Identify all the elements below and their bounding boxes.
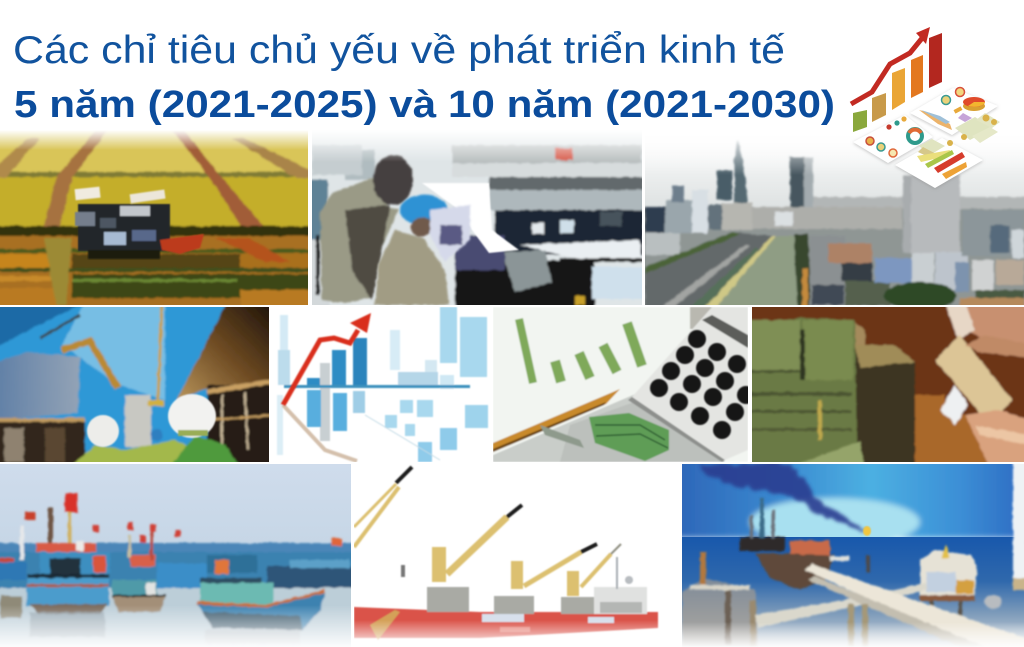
green paper bars xyxy=(519,319,642,383)
title line 2: 5 năm (2021-2025) và 10 năm (2021-2030) xyxy=(14,84,835,126)
rig platform xyxy=(740,498,870,590)
central blue bars xyxy=(307,338,367,441)
worker: standing man xyxy=(320,155,413,303)
trestle walkway xyxy=(755,583,927,628)
horizontal bar chart xyxy=(917,150,967,179)
panel: welding workers photo xyxy=(312,138,642,305)
rising bars xyxy=(853,33,942,132)
title line 1: Các chỉ tiêu chủ yếu về phát triển kinh tế xyxy=(13,29,785,72)
tower building xyxy=(0,352,80,420)
crane arm xyxy=(62,341,118,388)
red trend arrow xyxy=(851,27,930,104)
worker: man in blue helmet xyxy=(375,195,470,305)
panel: calculator and paper chart photo xyxy=(493,307,755,462)
icon: white hard hats xyxy=(87,394,216,447)
water reflections xyxy=(30,612,105,637)
panel: banknote stacks photo xyxy=(746,302,1024,467)
crane booms and posts xyxy=(354,484,611,587)
right process platform xyxy=(920,544,977,617)
small tan boat xyxy=(112,580,166,612)
report sheets xyxy=(853,88,998,188)
panel: blue growth chart graphic xyxy=(272,307,493,462)
welding glare xyxy=(422,183,519,253)
flare flame xyxy=(863,526,871,536)
calculator body xyxy=(632,307,748,460)
pale blue data blocks xyxy=(277,307,488,462)
teal and blue wooden boat xyxy=(197,578,325,630)
hands and banknotes xyxy=(966,307,1024,358)
red ship hull xyxy=(354,607,658,640)
pencil xyxy=(493,389,620,452)
smoke plume from flare xyxy=(700,464,866,531)
banknote stacks xyxy=(918,113,1000,160)
area chart xyxy=(919,106,972,130)
panel: city skyline and river photo xyxy=(645,140,1024,305)
panel: fishing boats photo xyxy=(0,464,357,647)
icon: business charts illustration xyxy=(851,27,1000,188)
green fan charts xyxy=(589,413,669,461)
panel: offshore oil platform photo xyxy=(676,458,1024,647)
green front stacks xyxy=(746,318,857,467)
flags and masts xyxy=(20,493,342,560)
skyline towers xyxy=(645,140,813,233)
neighbouring white column xyxy=(1013,458,1024,580)
icon: harvester machine xyxy=(75,187,204,259)
calculator buttons xyxy=(650,330,755,439)
crane bases xyxy=(427,587,594,614)
pie chart xyxy=(963,97,985,111)
dark rear stack xyxy=(855,345,915,467)
panel: construction site photo xyxy=(0,302,274,467)
red trend arrow xyxy=(283,313,371,461)
panel: rice field harvester photo xyxy=(0,125,314,310)
panel: cargo ship cranes photo xyxy=(354,464,659,640)
large blue boat xyxy=(27,541,110,614)
left rig structures xyxy=(682,552,758,647)
title xyxy=(13,29,835,126)
main pipeline xyxy=(805,564,1024,647)
doughnut charts and dots xyxy=(866,88,964,157)
ship superstructure xyxy=(594,587,647,614)
